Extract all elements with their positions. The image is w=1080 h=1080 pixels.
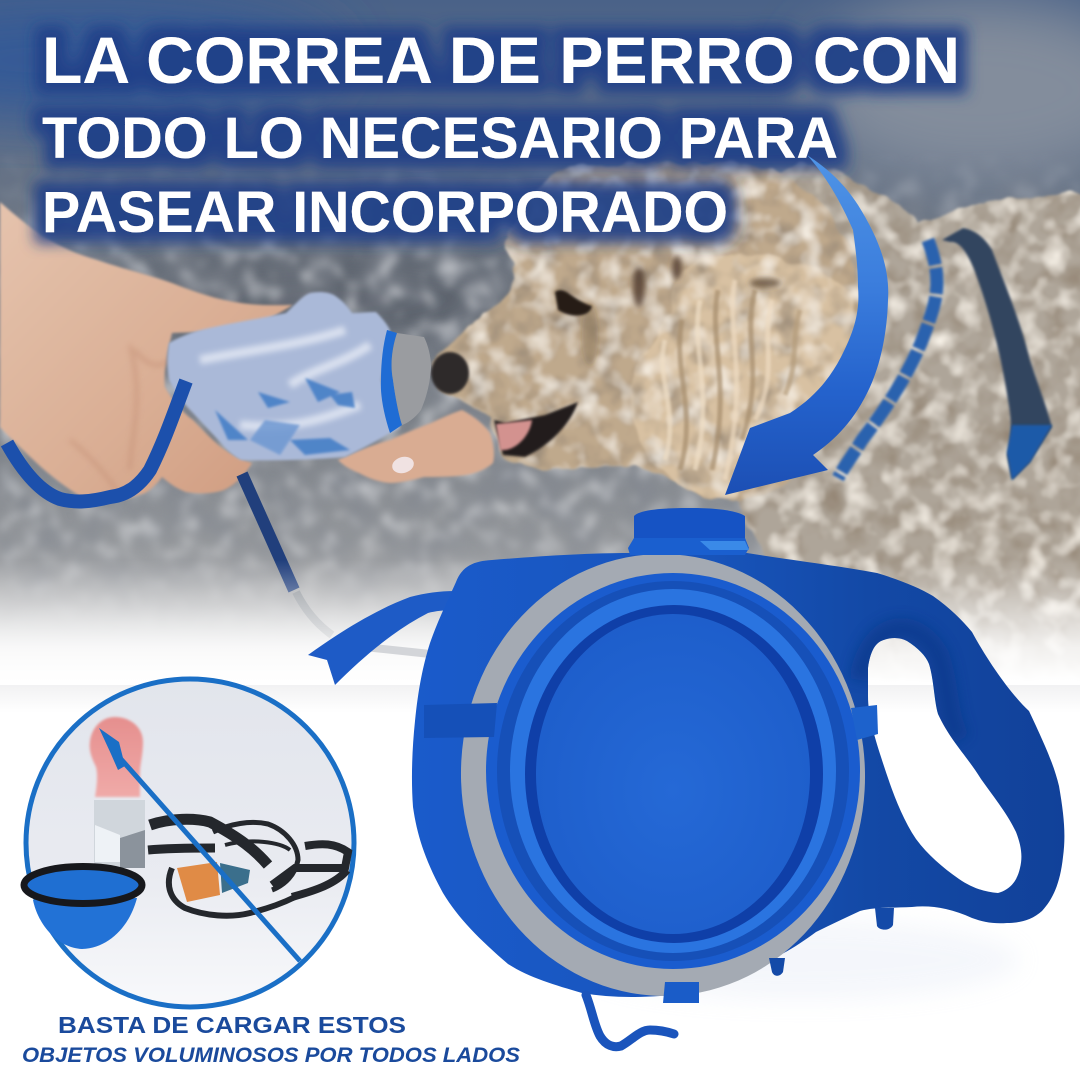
inset circle: items to avoid: [24, 679, 354, 1007]
bowl outer rim: [486, 573, 860, 969]
bottle label: [95, 825, 120, 862]
clear bottle: [94, 800, 145, 868]
hook: [586, 995, 674, 1047]
arrow head: [99, 728, 125, 770]
harness buckle: [1007, 425, 1052, 480]
bottle water: [120, 830, 145, 868]
dog: [431, 161, 1080, 680]
ribbon tape: [308, 591, 457, 685]
diagonal strike line: [120, 758, 300, 961]
bottle cap top: [634, 508, 745, 538]
fade to white: [0, 560, 1080, 685]
inset border: [26, 679, 354, 1007]
right hand: [338, 410, 494, 483]
caption: [22, 1012, 520, 1067]
dog harness strap: [942, 228, 1052, 480]
gray outer ring: [453, 547, 873, 1003]
title: [42, 23, 960, 245]
title: PASEAR INCORPORADO: [42, 180, 728, 245]
left clip: [424, 703, 497, 738]
bowl face: [536, 614, 810, 934]
pink bottle: [90, 717, 143, 797]
curved arrow: [725, 155, 888, 495]
bottle highlights: [200, 330, 370, 426]
foot right: [875, 908, 894, 930]
bottle cap: [392, 333, 431, 425]
left hand and arm: [0, 202, 293, 502]
dog eye: [555, 290, 592, 316]
leash fading end: [296, 592, 332, 635]
bottom clip: [663, 982, 699, 1003]
folding bottle: [168, 292, 400, 460]
handle shading: [860, 629, 960, 740]
dog tongue: [496, 420, 532, 450]
title: TODO LO NECESARIO PARA: [42, 106, 838, 171]
bowl inner groove: [525, 605, 823, 943]
ear curls: [663, 280, 800, 480]
bottle blue reflections: [215, 378, 355, 455]
right clip: [851, 705, 878, 740]
bottle blue ring: [381, 330, 402, 433]
retractable leash product: [308, 508, 1064, 1047]
inset background: [26, 679, 354, 1007]
dog collar: [838, 240, 937, 478]
ground shadow: [580, 920, 1020, 1000]
dog dark fur patches: [582, 256, 781, 365]
title: LA CORREA DE PERRO CON: [42, 23, 960, 97]
caption: BASTA DE CARGAR ESTOS: [58, 1012, 406, 1038]
dog ear: [631, 253, 853, 498]
wrist strap: [7, 381, 186, 501]
blue box: [220, 863, 250, 893]
leash line behind ribbon: [345, 645, 440, 655]
bowl rim: [24, 866, 142, 904]
caption: OBJETOS VOLUMINOSOS POR TODOS LADOS: [22, 1044, 520, 1067]
bowl outer dark edge: [497, 581, 849, 961]
bowl middle ring: [510, 589, 836, 953]
blue bowl: [33, 898, 137, 949]
dog head: [433, 161, 859, 500]
collar highlight: [700, 541, 749, 550]
dog nose: [431, 352, 469, 394]
fingernail: [390, 454, 416, 476]
cap collar: [628, 538, 749, 555]
hanging leash: [242, 474, 294, 590]
knuckle shading: [70, 345, 180, 495]
foot middle: [769, 958, 785, 976]
dog mouth: [494, 402, 578, 457]
black leash tangle: [148, 819, 348, 916]
hand holding bottle: [0, 202, 494, 635]
orange waste bag box: [177, 862, 220, 902]
dog body: [713, 163, 1080, 680]
dispenser body: [412, 553, 1064, 997]
background photo: blurred outdoor scene: [0, 0, 1080, 696]
